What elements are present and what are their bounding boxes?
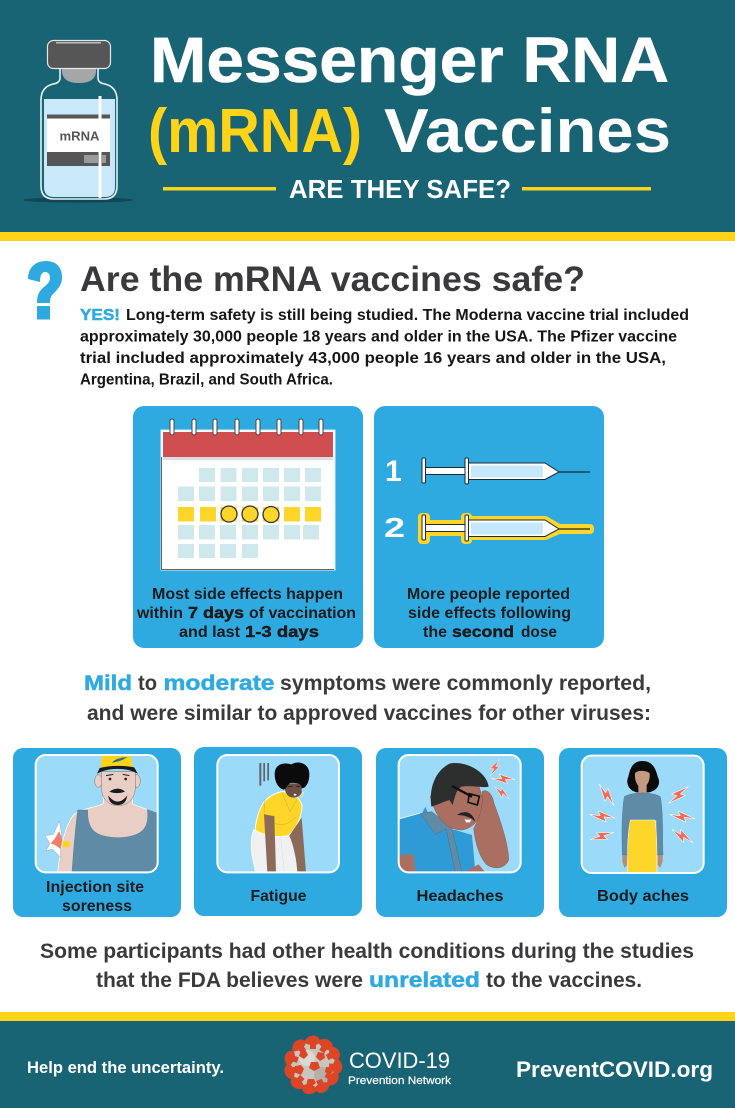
caption: second dose: dose (521, 624, 557, 641)
caption: second dose: second (452, 624, 514, 641)
text block: mild to moderate symptoms: moderate (164, 672, 275, 695)
icon: calendar (161, 421, 335, 570)
footer: help end the uncertainty: Help end the uncertainty. (27, 1059, 224, 1077)
icon: mRNA vaccine vial: mRNA (60, 128, 100, 144)
text block: unrelated conditions: Some participants had other health conditions during the studies (40, 940, 694, 963)
label: injection site soreness (46, 879, 144, 915)
caption: timing: and last (179, 624, 241, 641)
text block: safety answer: trial included approximately 43,000 people 16 years and older in the USA, (80, 350, 666, 367)
text block: safety answer: approximately 30,000 people 18 years and older in the USA. The Pfizer vaccine (80, 328, 677, 346)
icon: syringe one (422, 458, 590, 484)
caption: second dose: More people reported (407, 586, 570, 603)
footer band (0, 1012, 735, 1108)
illustration: man with sore arm (36, 755, 158, 872)
title: Vaccines (384, 97, 671, 166)
label: injection site soreness: soreness (62, 898, 132, 915)
text block: unrelated conditions: unrelated (369, 969, 480, 992)
label: fatigue: Fatigue (250, 888, 307, 905)
caption: second dose (407, 586, 571, 641)
text block: safety answer: Argentina, Brazil, and South Africa. (80, 372, 333, 388)
text block: safety answer: Long-term safety is still being studied. The Moderna vaccine trial included (126, 307, 689, 324)
panel: headaches (376, 748, 544, 917)
panel: second dose (374, 406, 604, 648)
panel: injection site soreness (13, 748, 181, 917)
title: Messenger RNA (150, 24, 669, 96)
label: injection site soreness: Injection site (46, 879, 144, 896)
caption: timing: 7 days (188, 605, 244, 622)
text block: mild to moderate symptoms: to (138, 672, 157, 695)
label: body aches: Body aches (597, 888, 689, 905)
caption: timing: 1-3 days (245, 624, 319, 641)
illustration: man with headache (399, 755, 521, 872)
logo: COVID-19 Prevention Network: Prevention Network (348, 1075, 452, 1087)
label: dose 1: 1 (385, 455, 402, 488)
text block: unrelated conditions: that the FDA believes were (96, 969, 363, 992)
caption: timing (136, 586, 356, 641)
caption: timing: within (136, 605, 183, 622)
heading: are the mRNA vaccines safe: Are the mRNA vaccines safe? (80, 259, 585, 299)
text block: mild to moderate symptoms: and were similar to approved vaccines for other viruses: (87, 702, 651, 725)
panel: fatigue (194, 747, 362, 916)
text block: mild to moderate symptoms: Mild (84, 672, 132, 695)
caption: second dose: the (423, 624, 447, 641)
text block: unrelated conditions (40, 940, 694, 992)
label: dose 2: 2 (384, 512, 405, 543)
header band (0, 0, 735, 241)
illustration: tired woman (217, 755, 339, 872)
caption: timing: of vaccination (249, 605, 356, 622)
illustration: woman with body aches (582, 756, 704, 873)
subtitle: are they safe (163, 176, 651, 204)
text block: safety answer: YES! (80, 307, 120, 324)
icon: syringe two highlighted (422, 515, 590, 541)
text block: mild to moderate symptoms: symptoms were commonly reported, (280, 672, 651, 695)
subtitle: are they safe: ARE THEY SAFE? (289, 176, 511, 204)
caption: second dose: side effects following (408, 605, 571, 622)
icon: coronavirus (282, 1036, 343, 1095)
logo: COVID-19 Prevention Network: COVID-19 (349, 1048, 450, 1073)
icon: question mark (28, 261, 62, 320)
text block: mild to moderate symptoms (84, 672, 651, 725)
panel: body aches (559, 748, 727, 917)
caption: timing: Most side effects happen (152, 586, 343, 603)
footer: website: PreventCOVID.org (516, 1057, 713, 1082)
logo: COVID-19 Prevention Network (282, 1036, 452, 1095)
text block: unrelated conditions: to the vaccines. (486, 969, 642, 992)
icon: mRNA vaccine vial (23, 40, 133, 203)
title: (mRNA) (148, 97, 362, 166)
text block: safety answer (80, 307, 689, 388)
label: headaches: Headaches (416, 888, 504, 905)
title (148, 24, 671, 166)
panel: side effect timing (133, 406, 363, 648)
